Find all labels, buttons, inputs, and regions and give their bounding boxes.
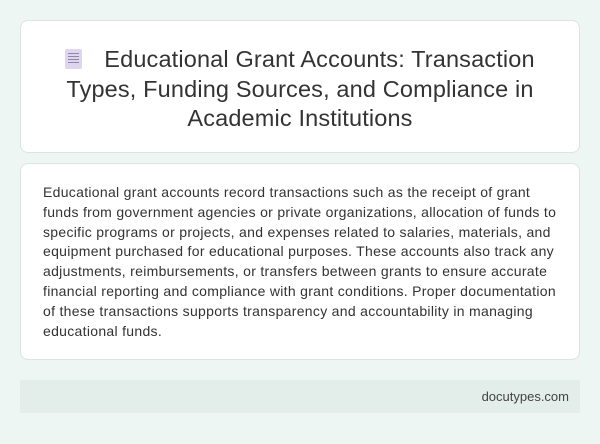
text block: Educational grant accounts record transactions such as the receipt of grant funds from government agencies or private organizations, allocation of funds to specific programs or projects, and expenses related to salaries, materials, and equipment purchased for educational purposes. These accounts also track any adjustments, reimbursements, or transfers between grants to ensure accurate financial reporting and compliance with grant conditions. Proper documentation of these transactions supports transparency and accountability in managing educational funds.	[43, 184, 556, 339]
panel: description	[20, 163, 580, 360]
icon: document	[65, 49, 82, 69]
footer text: docutypes.com	[482, 389, 569, 404]
panel: title	[20, 20, 580, 153]
footer	[20, 380, 580, 413]
title: Educational Grant Accounts: Transaction Types, Funding Sources, and Compliance in Academic Institutions	[66, 46, 535, 131]
